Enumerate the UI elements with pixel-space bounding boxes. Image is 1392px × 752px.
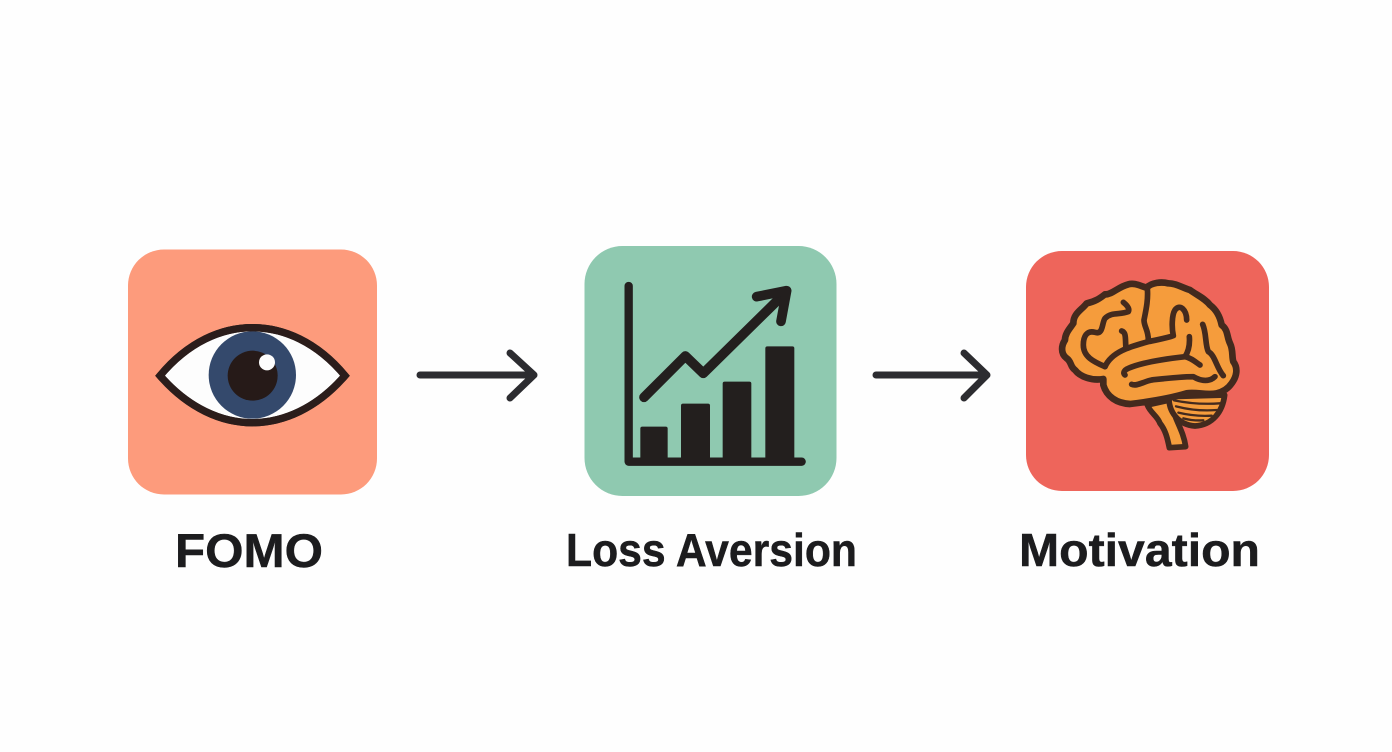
arrow: Loss Aversion to Motivation xyxy=(876,353,987,398)
chart bars xyxy=(640,346,794,462)
panel background: Motivation xyxy=(1026,251,1269,491)
arrow: FOMO to Loss Aversion xyxy=(420,353,534,398)
icon: rising bar chart xyxy=(629,286,802,462)
panel background: FOMO xyxy=(128,250,377,494)
trend arrow xyxy=(644,291,787,397)
panel: Loss Aversion xyxy=(584,246,836,496)
cerebellum folds xyxy=(1174,400,1220,420)
cerebellum xyxy=(1169,395,1225,426)
label: Loss Aversion: Loss Aversion xyxy=(566,524,857,576)
icon: eye xyxy=(160,328,345,423)
panel background: Loss Aversion xyxy=(584,246,836,496)
brain stem xyxy=(1147,400,1186,448)
label: Motivation: Motivation xyxy=(1019,524,1260,576)
panel: FOMO xyxy=(128,250,377,494)
brain folds xyxy=(1083,288,1223,385)
icon: brain xyxy=(1062,283,1236,448)
chart axes xyxy=(629,286,802,462)
brain outline xyxy=(1062,283,1236,404)
label: FOMO: FOMO xyxy=(175,524,323,577)
panel: Motivation xyxy=(1026,251,1269,491)
